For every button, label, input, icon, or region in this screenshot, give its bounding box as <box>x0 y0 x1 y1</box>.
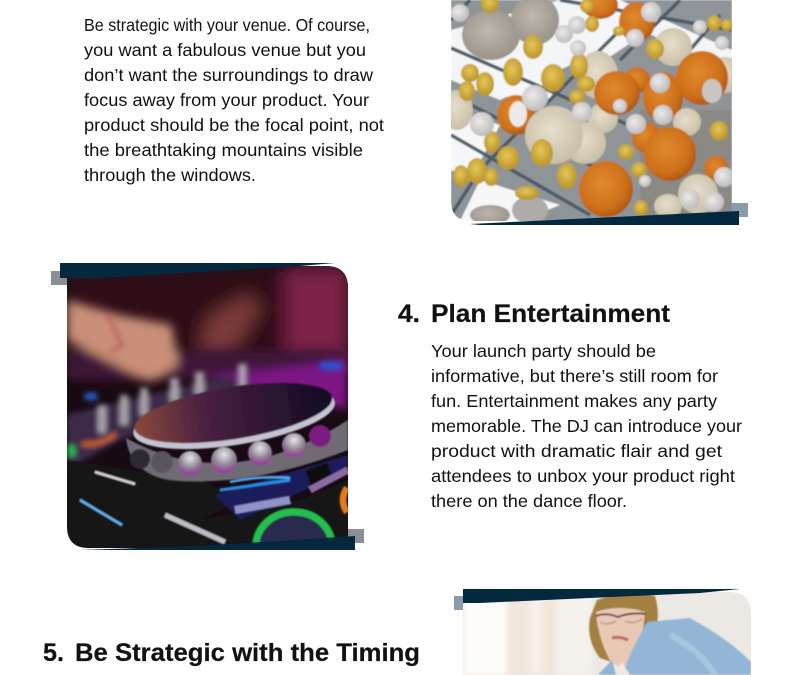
paragraph: entertainment advice: there on the dance floor. <box>431 491 627 511</box>
paragraph: entertainment advice: memorable. The DJ can introduce your <box>431 416 742 436</box>
paragraph: venue advice: focus away from your product. Your <box>84 90 369 110</box>
paragraph: venue advice: product should be the focal point, not <box>84 115 384 135</box>
photo: DJ mixer <box>51 263 364 550</box>
paragraph: venue advice: the breathtaking mountains visible <box>84 140 363 160</box>
photo: balloons <box>441 0 748 225</box>
paragraph: entertainment advice: attendees to unbox your product right <box>431 466 735 486</box>
paragraph: venue advice <box>84 15 384 185</box>
heading: 5. Be Strategic with the Timing: 5. <box>43 639 64 667</box>
paragraph: entertainment advice: Your launch party should be <box>431 341 656 361</box>
paragraph: entertainment advice <box>431 341 742 511</box>
paragraph: entertainment advice: fun. Entertainment makes any party <box>431 391 717 411</box>
hair <box>589 594 658 662</box>
heading: 4. Plan Entertainment: 4. <box>398 300 420 328</box>
heading: 5. Be Strategic with the Timing: Be Strategic with the Timing <box>75 639 420 667</box>
accent: woman photo dark bar <box>463 589 740 603</box>
paragraph: entertainment advice: informative, but there’s still room for <box>431 366 718 386</box>
accent: DJ photo bottom dark bar <box>80 536 355 550</box>
heading: 4. Plan Entertainment: Plan Entertainment <box>431 300 671 328</box>
accent: balloon photo grey tab <box>730 203 748 217</box>
paragraph: venue advice: through the windows. <box>84 165 256 185</box>
accent: woman photo grey tab <box>454 596 473 610</box>
accent: DJ photo top dark bar <box>60 263 335 278</box>
accent: balloon photo dark bar <box>470 211 739 225</box>
photo: woman on the phone <box>454 589 751 675</box>
paragraph: venue advice: don’t want the surroundings to draw <box>84 65 373 85</box>
accent: DJ photo bottom-right grey tab <box>345 529 364 543</box>
accent: DJ photo top-left grey tab <box>51 271 70 285</box>
paragraph: venue advice: you want a fabulous venue but you <box>84 40 366 60</box>
paragraph: entertainment advice: product with dramatic flair and get <box>431 441 722 461</box>
paragraph: venue advice: Be strategic with your venue. Of course, <box>84 15 370 35</box>
